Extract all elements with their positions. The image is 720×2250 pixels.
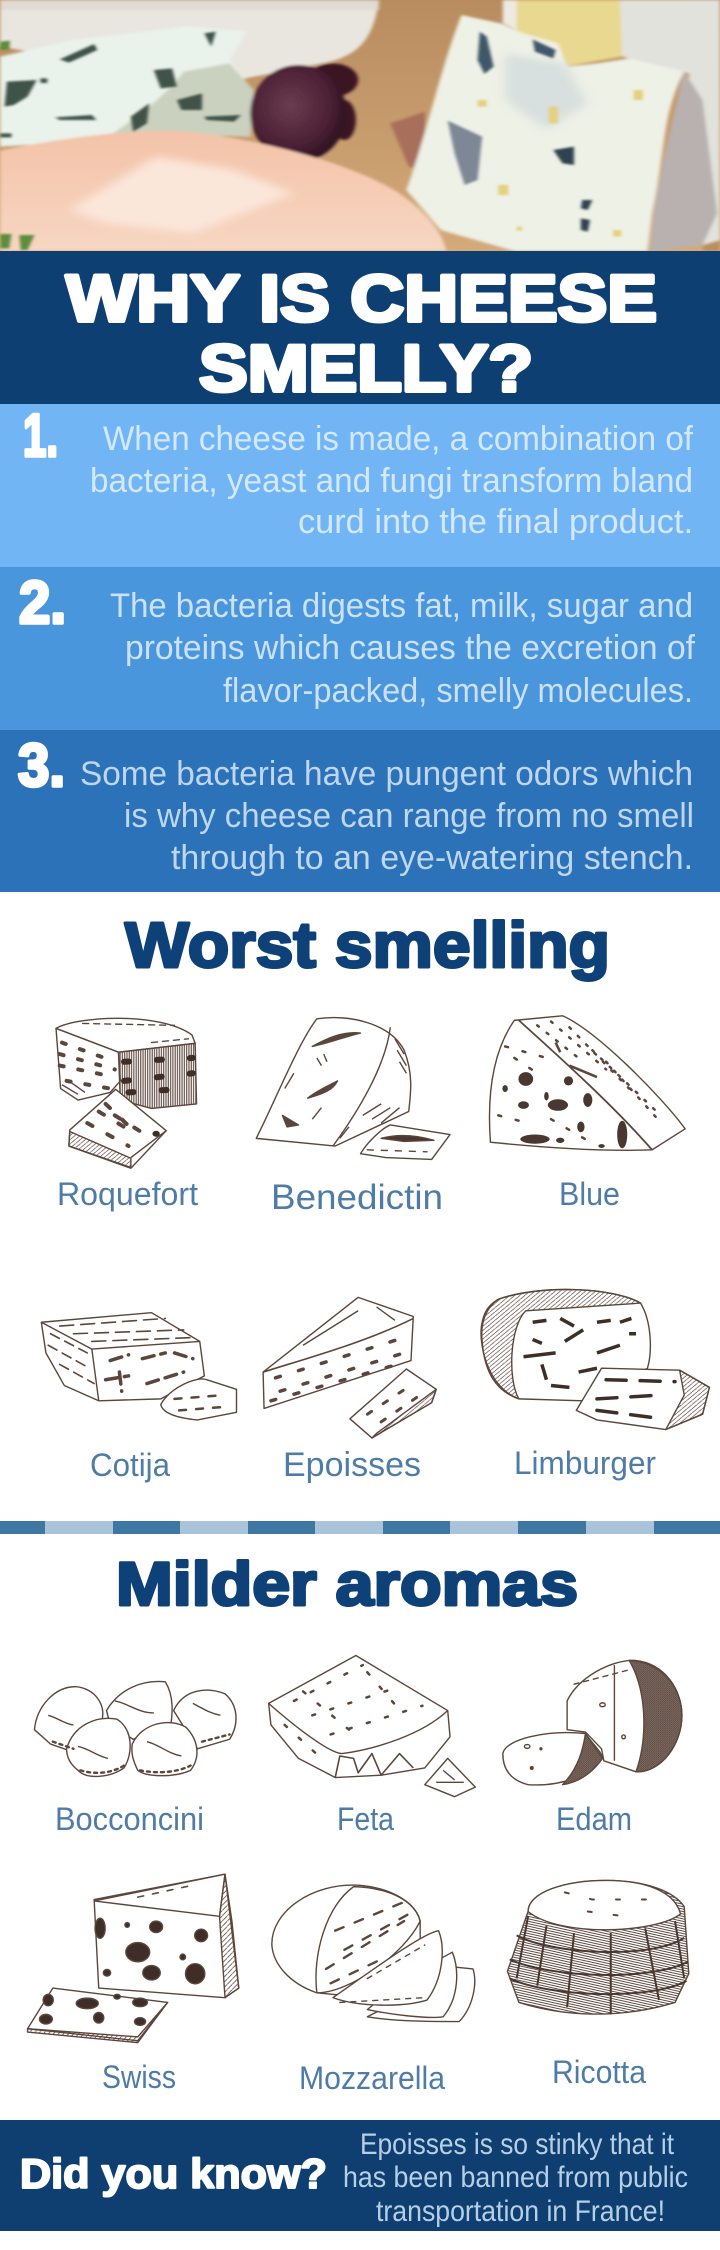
label: Benedictin: Benedictin [271, 1178, 443, 1217]
step 2 text: flavor-packed, smelly molecules. [223, 672, 693, 710]
icon: mozzarella [272, 1885, 475, 2022]
label: Mozzarella: Mozzarella [299, 2060, 445, 2096]
label: Roquefort: Roquefort [57, 1176, 198, 1212]
label: Cotija: Cotija [90, 1447, 170, 1483]
icon: limburger [481, 1290, 709, 1430]
panel: step 3 [0, 730, 720, 892]
icon: blue [489, 1016, 685, 1150]
label: Epoisses: Epoisses [283, 1446, 421, 1484]
icon: benedictin [256, 1018, 450, 1159]
title line two: SMELLY? [199, 331, 533, 405]
icon: edam [503, 1660, 682, 1785]
label: Limburger: Limburger [514, 1445, 656, 1481]
label: Ricotta: Ricotta [552, 2054, 646, 2090]
step 2 text: The bacteria digests fat, milk, sugar and [110, 587, 693, 625]
title band [0, 251, 720, 405]
photo: assorted cheeses on a board [0, 0, 720, 251]
cheese illustrations: milder aromas [28, 1656, 689, 2043]
step 1 text: bacteria, yeast and fungi transform bland [90, 462, 693, 500]
heading: worst smelling: Worst smelling [125, 909, 610, 981]
cheese illustrations: worst smelling [41, 1016, 709, 1438]
icon: ricotta [507, 1880, 689, 2014]
labels: milder aromas [55, 1801, 646, 2096]
step 3 text: Some bacteria have pungent odors which [80, 755, 693, 793]
fact text [343, 2128, 688, 2228]
icon: swiss [28, 1874, 239, 2043]
panel: step 2 [0, 567, 720, 730]
labels: worst smelling [57, 1176, 656, 1484]
number 3: 3. [18, 732, 65, 799]
step 3 text: through to an eye-watering stench. [171, 839, 693, 877]
number 2: 2. [19, 569, 66, 636]
fact text: has been banned from public [343, 2161, 688, 2194]
heading: milder aromas: Milder aromas [116, 1550, 578, 1618]
step 2 text: proteins which causes the excretion of [125, 629, 696, 667]
label: Edam: Edam [556, 1801, 632, 1837]
panel: step 1 [0, 402, 720, 567]
fact text: transportation in France! [376, 2195, 665, 2228]
step 1 text [90, 420, 694, 541]
step 2 text [110, 587, 696, 710]
step 3 text: is why cheese can range from no smell [124, 797, 694, 835]
panel: did you know [0, 2120, 720, 2231]
icon: feta [269, 1656, 475, 1797]
icon: roquefort [56, 1018, 197, 1168]
label: Swiss: Swiss [102, 2059, 176, 2095]
title line one: WHY IS CHEESE [66, 261, 657, 335]
heading: did you know: Did you know? [20, 2150, 327, 2197]
icon: cotija [41, 1313, 236, 1420]
step 1 text: curd into the final product. [298, 503, 693, 541]
label: Bocconcini: Bocconcini [55, 1801, 204, 1837]
step 1 text: When cheese is made, a combination of [103, 420, 694, 458]
label: Blue: Blue [559, 1176, 620, 1212]
number 1: 1. [23, 402, 58, 469]
label: Feta: Feta [337, 1801, 394, 1837]
fact text: Epoisses is so stinky that it [360, 2128, 675, 2161]
icon: bocconcini [34, 1681, 236, 1776]
step 3 text [80, 755, 694, 877]
icon: epoisses [263, 1297, 436, 1438]
